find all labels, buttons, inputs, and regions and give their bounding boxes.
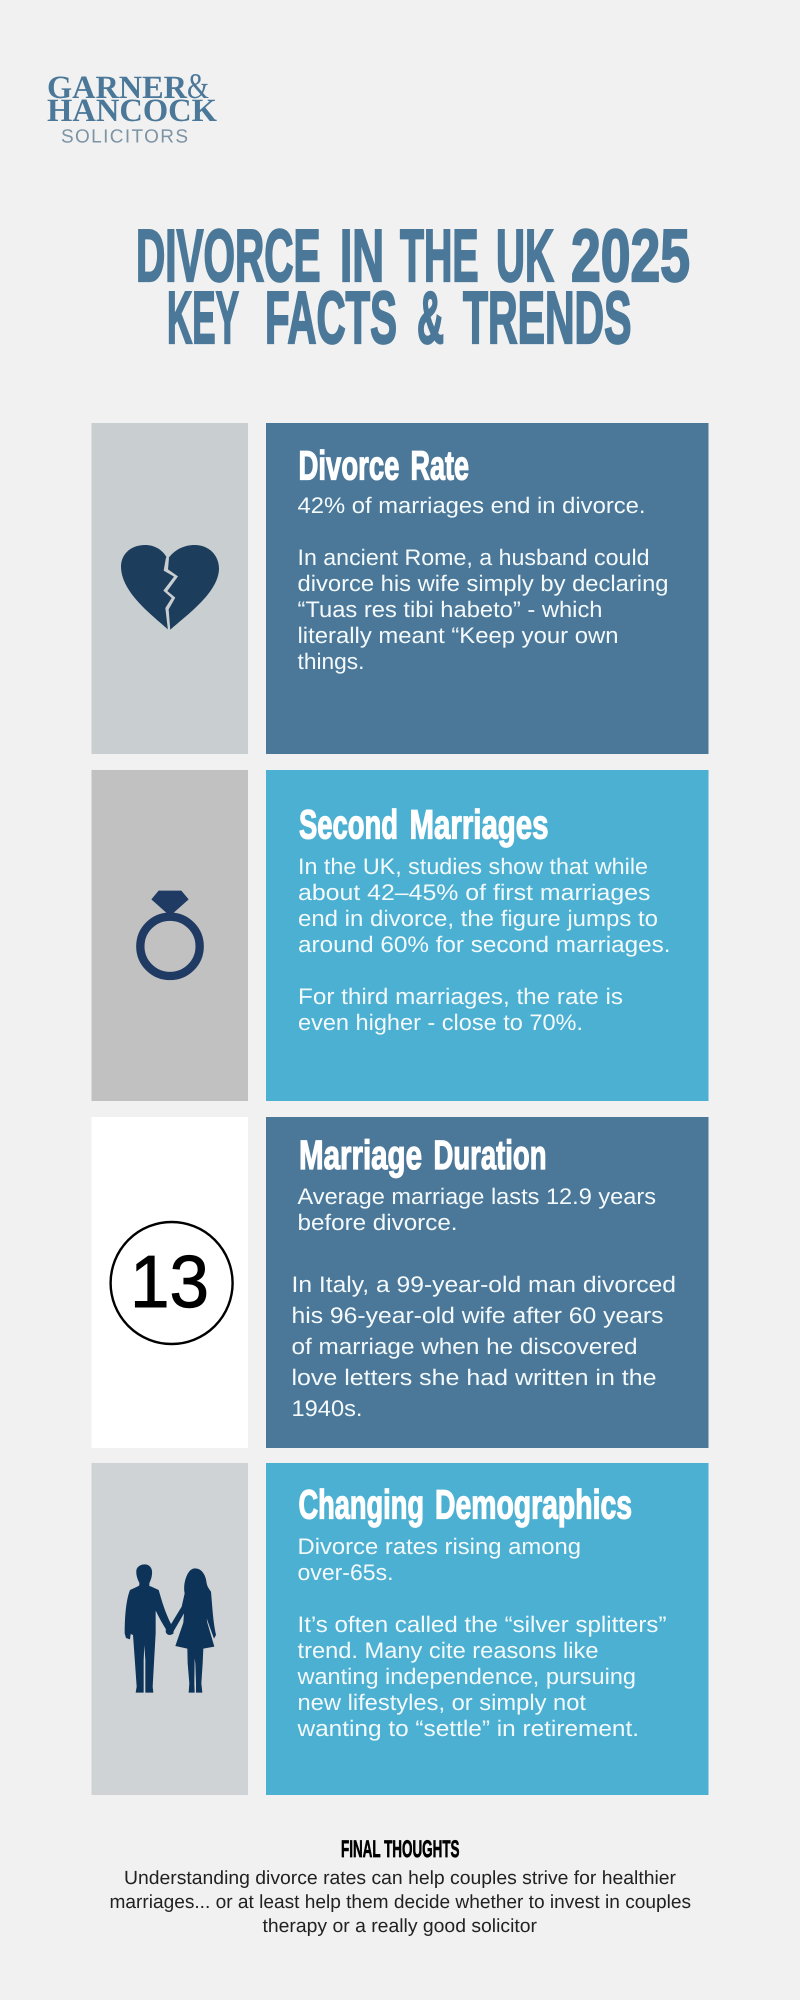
text: marriage duration body: his 96-year-old wife after 60 years: [292, 1303, 664, 1328]
text: divorce rate body: [298, 493, 668, 674]
text: marriage duration body: love letters she had written in the: [292, 1365, 656, 1390]
text: changing demographics body: wanting to “settle” in retirement.: [296, 1716, 639, 1741]
text: final thoughts body: marriages... or at least help them decide whether to invest in couples: [110, 1892, 691, 1913]
logo: [47, 66, 218, 148]
text: changing demographics body: wanting independence, pursuing: [296, 1664, 636, 1689]
icon: diamond ring: [140, 891, 200, 976]
heading: second marriages: [299, 802, 548, 848]
text: second marriages body: about 42–45% of first marriages: [298, 880, 650, 905]
logo: HANCOCK: [47, 93, 218, 129]
heading: marriage duration: Duration: [434, 1132, 546, 1178]
text: changing demographics body: It’s often called the “silver splitters”: [298, 1612, 666, 1637]
title: TRENDS: [463, 276, 632, 359]
text: second marriages body: [298, 854, 670, 1035]
title: KEY: [167, 276, 239, 359]
text: divorce rate body: In ancient Rome, a husband could: [298, 545, 650, 570]
text: second marriages body: around 60% for second marriages.: [298, 932, 670, 957]
text: divorce rate body: divorce his wife simply by declaring: [298, 571, 668, 596]
title: &: [417, 276, 444, 359]
icon: number 13 in circle: 13: [130, 1240, 209, 1323]
icon: broken heart: [121, 545, 219, 631]
text: marriage duration body: before divorce.: [298, 1210, 458, 1235]
text: divorce rate body: “Tuas res tibi habeto” - which: [298, 597, 602, 622]
text: final thoughts body: Understanding divorce rates can help couples strive for healthier: [124, 1868, 677, 1889]
heading: marriage duration: [299, 1132, 546, 1178]
panel: second marriages: [92, 770, 708, 1101]
text: divorce rate body: 42% of marriages end in divorce.: [298, 493, 646, 518]
text: changing demographics body: Divorce rates rising among: [298, 1534, 581, 1559]
text: marriage duration body: 1940s.: [292, 1396, 362, 1421]
panel: marriage duration: [92, 1117, 708, 1448]
text: changing demographics body: [296, 1534, 666, 1741]
text: second marriages body: even higher - close to 70%.: [298, 1010, 583, 1035]
text: divorce rate body: literally meant “Keep your own: [298, 623, 618, 648]
heading: divorce rate: Rate: [410, 442, 469, 488]
text: marriage duration body: In Italy, a 99-year-old man divorced: [292, 1272, 676, 1297]
text: second marriages body: end in divorce, the figure jumps to: [298, 906, 658, 931]
icon: couple holding hands: [125, 1564, 216, 1693]
heading: marriage duration: Marriage: [299, 1132, 422, 1178]
panel: divorce rate: [92, 423, 708, 754]
title: DIVORCE: [136, 214, 320, 297]
text: final thoughts body: therapy or a really good solicitor: [262, 1916, 538, 1937]
heading: changing demographics: Demographics: [435, 1482, 632, 1528]
heading: second marriages: Marriages: [410, 802, 548, 848]
title: FACTS: [265, 276, 397, 359]
text: marriage duration body: of marriage when he discovered: [292, 1334, 638, 1359]
text: marriage duration body: [292, 1184, 676, 1421]
text: changing demographics body: over-65s.: [298, 1560, 394, 1585]
text: divorce rate body: things.: [298, 649, 364, 674]
logo: SOLICITORS: [61, 126, 188, 148]
heading: second marriages: Second: [299, 802, 398, 848]
text: changing demographics body: trend. Many cite reasons like: [298, 1638, 598, 1663]
text: changing demographics body: new lifestyles, or simply not: [298, 1690, 587, 1715]
title: 2025: [571, 214, 690, 297]
logo: GARNER: [47, 70, 188, 106]
text: final thoughts body: [110, 1868, 691, 1937]
panel: changing demographics: [92, 1463, 708, 1795]
heading: changing demographics: [298, 1482, 632, 1528]
text: marriage duration body: Average marriage lasts 12.9 years: [298, 1184, 656, 1209]
icon: number 13 in circle: [111, 1222, 233, 1344]
text: second marriages body: In the UK, studies show that while: [298, 854, 648, 879]
heading: final thoughts: FINAL THOUGHTS: [341, 1836, 460, 1863]
title: THE: [400, 214, 478, 297]
heading: changing demographics: Changing: [298, 1482, 424, 1528]
heading: divorce rate: Divorce: [298, 442, 400, 488]
title: UK: [496, 214, 554, 297]
title: IN: [340, 214, 384, 297]
logo: &: [187, 66, 209, 106]
text: second marriages body: For third marriages, the rate is: [298, 984, 623, 1009]
title: [136, 214, 690, 359]
